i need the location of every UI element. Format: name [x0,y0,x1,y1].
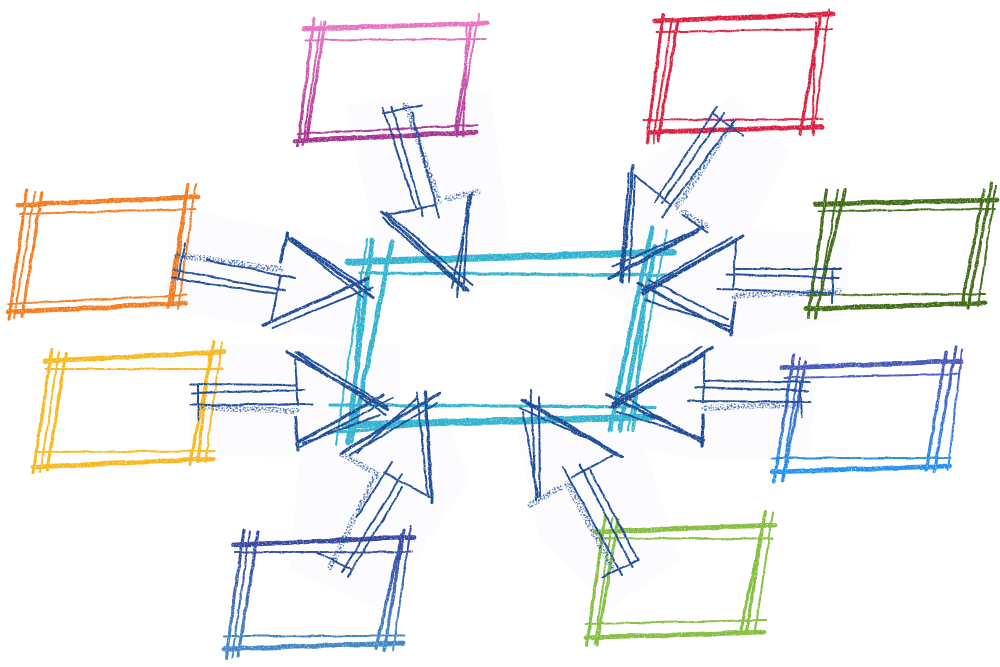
panel: orange box [8,184,198,319]
panel: central cyan box [327,228,673,445]
panel: pink box [295,14,487,146]
arrow: dark green box to centre [638,236,841,335]
arrow: red box to centre [609,107,743,282]
arrow: light green box to centre [520,390,638,577]
panel: blue box [772,347,962,482]
arrow: yellow box to centre [190,352,393,450]
arrow: pink box to centre [382,105,478,297]
arrow: orange box to centre [172,233,373,328]
panel: red box [644,10,833,143]
panel: navy box [224,526,414,658]
paper patches behind arrows [165,90,850,610]
arrow: blue box to centre [607,347,810,446]
panel: yellow box [33,341,224,473]
arrow: navy box to centre [318,392,439,577]
panel: dark green box [806,183,997,318]
panel: light green box [586,511,775,645]
